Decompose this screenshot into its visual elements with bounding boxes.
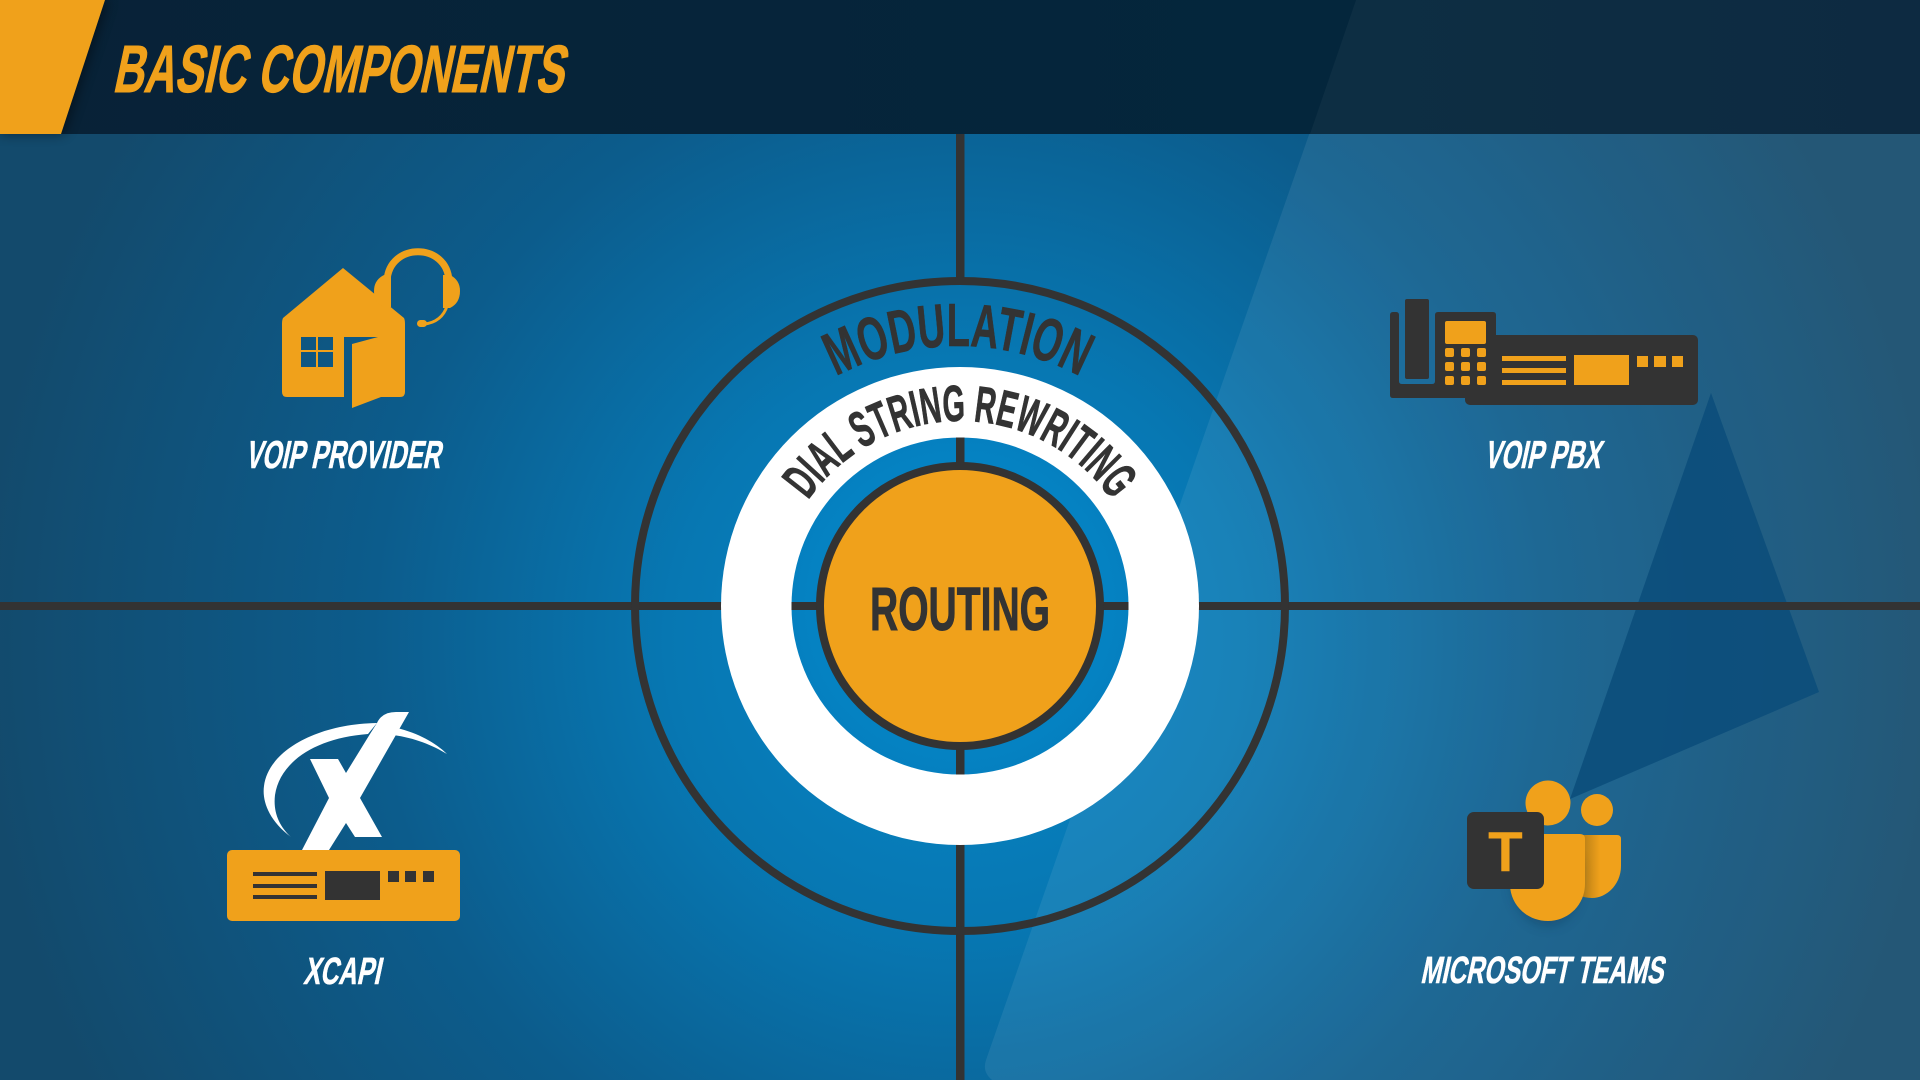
PBX unit [1465,335,1698,405]
modulation label: MODULATION [820,304,1096,376]
headset [387,252,449,281]
header background [0,0,1920,134]
icon: desk phone and PBX [1390,299,1698,405]
accent shadow [0,0,108,134]
routing core [820,466,1100,746]
label: XCAPI [301,950,387,993]
dial string rewriting label: DIAL STRING REWRITING [781,385,1136,499]
T glyph: T [1488,820,1523,884]
icon: house with headset [282,252,460,408]
outer ring [635,281,1285,931]
body shadow [1512,860,1580,925]
component: VoIP PBX [1390,299,1698,477]
component: VoIP provider [243,252,460,477]
icon: X logo and gateway [227,712,460,921]
gateway panel [253,871,434,900]
white ring [721,367,1199,845]
orange accent [0,0,105,134]
label: VOIP PROVIDER [243,433,447,477]
label: MICROSOFT TEAMS [1418,949,1670,992]
background dark triangle [1570,393,1819,799]
phone screen and keypad [1445,321,1486,385]
handset [1405,299,1429,379]
X logo [264,712,447,850]
header bar [0,0,1920,134]
inner ticks [792,438,1128,774]
background light angled shape [985,0,1920,1080]
PBX panel [1502,355,1683,385]
icon: Teams logo [1467,780,1621,925]
component: Microsoft Teams [1418,780,1670,992]
target diagram [631,277,1289,935]
front person [1510,780,1585,921]
routing label: ROUTING [870,575,1050,643]
inner blue ring [792,438,1128,774]
label: VOIP PBX [1482,433,1607,477]
T tile [1467,812,1544,889]
header light facet [1310,0,1920,134]
phone base [1390,312,1496,398]
gateway unit [227,850,460,921]
title: BASIC COMPONENTS [109,33,576,107]
rear person [1566,794,1621,898]
house [282,268,405,408]
component: XCAPI [227,712,460,993]
